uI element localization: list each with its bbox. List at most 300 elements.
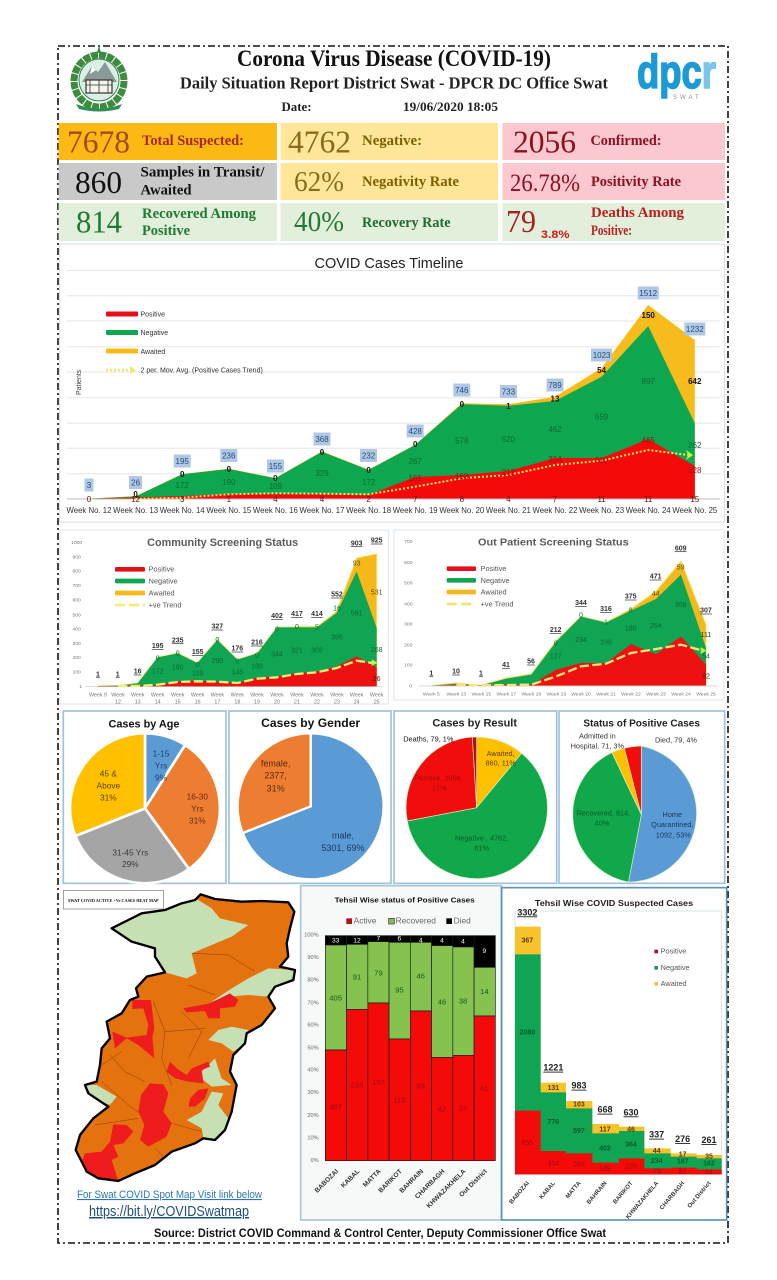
community totals: 1 — [116, 671, 120, 678]
community totals: 155 — [192, 649, 204, 656]
age pie labels: 29% — [122, 859, 139, 869]
tehsil status heading: Tehsil Wise status of Positive Cases — [335, 896, 475, 905]
out patient y axis: 0 — [409, 683, 412, 689]
died value labels: 3 — [180, 495, 185, 504]
died value labels: 12 — [131, 495, 141, 504]
community y axis — [71, 540, 82, 690]
age pie labels: 45 & — [100, 769, 117, 779]
weekly total labels: 1232 — [686, 325, 704, 334]
died value labels: 4 — [320, 495, 325, 504]
subtitle: Daily Situation Report District Swat - DPCR DC Office Swat — [180, 74, 609, 92]
community area: awaited — [98, 554, 377, 686]
out patient totals: 212 — [550, 627, 562, 634]
positive value labels — [409, 436, 702, 483]
community y axis: 800 — [73, 569, 81, 575]
timeline week labels: Week No. 12 — [67, 506, 111, 515]
tehsil status category labels: Out District — [458, 1168, 489, 1199]
gender pie labels: 5301, 69% — [322, 843, 364, 853]
out patient week labels: Week 5 — [423, 691, 440, 697]
community week labels: Week — [211, 692, 224, 698]
out patient series labels: 234 — [575, 637, 587, 644]
KPI card: negative: 4762 — [288, 124, 351, 160]
timeline week labels: Week No. 13 — [113, 506, 158, 515]
suspected positive labels: 64 — [705, 1170, 713, 1177]
weekly total labels: 746 — [455, 386, 469, 395]
out patient week labels — [423, 691, 716, 697]
KPI card: samples awaited: Samples in Transit/ — [140, 164, 265, 180]
out patient trend line — [456, 645, 707, 685]
recovered labels: 95 — [395, 986, 404, 995]
recovered labels — [329, 968, 489, 1006]
out patient y axis: 100 — [404, 663, 413, 669]
report date — [282, 99, 499, 114]
died value labels: 4 — [273, 495, 278, 504]
community series labels: 0 — [235, 659, 239, 666]
status pie labels: Admitted in — [579, 731, 616, 740]
tehsil status y axis: 50% — [307, 1045, 319, 1051]
suspected positive labels: 314 — [548, 1161, 559, 1168]
KPI card: recovered: Recovered Among — [142, 206, 257, 222]
suspected legend — [654, 947, 690, 988]
out patient series labels: 199 — [600, 640, 612, 647]
heat map title box: SWAT COVID ACTIVE +Ve CASES HEAT MAP — [68, 898, 159, 903]
suspected awaited labels: 367 — [522, 937, 533, 944]
suspected category labels: MATTA — [565, 1180, 583, 1200]
map link caption: For Swat COVID Spot Map Visit link below — [77, 1189, 262, 1201]
died value labels: 11 — [597, 495, 606, 504]
community series labels: 0 — [176, 651, 180, 658]
heat map title box — [63, 890, 163, 909]
negative value labels: 329 — [315, 469, 329, 478]
tehsil status category labels: CHARBAGH — [414, 1168, 447, 1201]
tehsil status y axis: 70% — [307, 1000, 319, 1006]
died value labels: 15 — [690, 495, 700, 504]
community week labels: Week — [250, 692, 264, 698]
suspected negative labels: 162 — [703, 1161, 715, 1168]
out patient legend: Awaited — [481, 588, 507, 597]
community totals: 402 — [271, 613, 283, 620]
tehsil status category labels: KABAL — [340, 1168, 361, 1190]
suspected totals: 668 — [597, 1105, 612, 1115]
panel: tehsil wise status of positive cases — [301, 886, 501, 1220]
timeline week labels: Week No. 23 — [579, 506, 624, 515]
tehsil status y axis: 30% — [307, 1090, 319, 1096]
community area: negative — [98, 571, 377, 686]
community y axis: 900 — [73, 555, 81, 561]
recovered labels: 91 — [353, 972, 361, 981]
area: negative — [89, 326, 695, 499]
timeline week labels: Week No. 15 — [206, 506, 252, 515]
out patient y axis: 300 — [404, 622, 413, 628]
community totals: 414 — [311, 611, 323, 618]
tehsil status category labels: MATTA — [362, 1168, 383, 1189]
out patient y axis — [404, 539, 413, 689]
community totals: 235 — [172, 637, 184, 644]
source footer: Source: District COVID Command & Control Center, Deputy Commissioner Office Swat — [154, 1226, 606, 1240]
out patient totals: 1 — [479, 670, 483, 677]
out patient series labels — [550, 564, 711, 681]
panel: COVID cases timeline — [60, 244, 724, 522]
out patient series labels: 111 — [701, 632, 711, 639]
community y axis: 600 — [73, 598, 81, 604]
suspected awaited labels: 46 — [627, 1126, 635, 1133]
weekly total labels: 368 — [315, 435, 329, 444]
out patient totals: 10 — [452, 669, 460, 676]
status pie labels — [571, 731, 697, 840]
community legend — [115, 565, 181, 609]
weekly total labels: 26 — [131, 478, 141, 488]
tehsil status category labels: BABOZAI — [314, 1168, 340, 1195]
out patient week labels: Week 24 — [671, 691, 691, 697]
died value labels: 8 — [460, 495, 465, 504]
out patient area: negative — [431, 575, 706, 686]
out patient y axis: 700 — [404, 539, 413, 545]
died labels: 4 — [440, 938, 444, 945]
timeline legend: Positive — [140, 312, 165, 318]
out patient week labels: Week 22 — [621, 691, 641, 697]
suspected totals — [517, 907, 716, 1145]
out patient totals: 316 — [600, 606, 612, 613]
community totals: 327 — [212, 624, 223, 631]
community legend: Awaited — [149, 588, 175, 597]
community week labels: Week — [310, 692, 324, 698]
timeline week labels: Week No. 17 — [300, 506, 344, 515]
report date: Date: — [282, 99, 312, 114]
community series labels: 321 — [291, 647, 303, 654]
community week labels: 14 — [155, 700, 161, 706]
suspected category labels: BARIKOT — [612, 1180, 635, 1206]
suspected totals: 1221 — [543, 1063, 563, 1073]
timeline week labels: Week No. 16 — [253, 506, 298, 515]
community totals: 176 — [232, 646, 243, 653]
tehsil status y axis: 80% — [307, 977, 319, 983]
community series labels: 146 — [232, 669, 243, 676]
tehsil status y axis: 40% — [307, 1068, 319, 1074]
map district outline — [76, 894, 295, 1181]
community y axis: 100 — [73, 669, 81, 675]
header: left district logo — [74, 45, 124, 112]
community week labels: Week — [231, 692, 244, 698]
status pie labels: 40% — [595, 819, 610, 828]
suspected positive labels: 855 — [522, 1140, 533, 1147]
tehsil status legend — [346, 916, 471, 926]
out patient y axis: 600 — [404, 560, 413, 566]
suspected negative labels: 597 — [573, 1128, 585, 1135]
suspected totals: 276 — [675, 1134, 690, 1144]
community series labels: 0 — [196, 662, 200, 669]
community week labels: Week — [370, 692, 384, 698]
suspected category labels: CHARBAGH — [659, 1181, 686, 1211]
out patient week labels: Week 18 — [522, 691, 541, 697]
tehsil status y axis: 90% — [307, 955, 319, 961]
map high-case areas — [82, 993, 238, 1181]
KPI card: confirmed: 2056 — [513, 124, 576, 160]
KPI card: negativity rate: Negativity Rate — [362, 174, 460, 190]
community week labels: 22 — [314, 700, 320, 706]
age pie labels: Yrs — [155, 760, 167, 770]
out patient totals: 375 — [625, 594, 637, 601]
community series labels: 302 — [311, 647, 323, 654]
KPI card: confirmed — [502, 123, 725, 160]
out patient legend: Positive — [481, 564, 506, 573]
weekly total labels: 236 — [222, 452, 236, 460]
KPI card: recovered: Positive — [142, 223, 191, 239]
KPI card: recovery rate: 40% — [294, 207, 344, 238]
community totals — [96, 538, 383, 678]
suspected positive labels — [522, 1140, 713, 1177]
community week labels: Week — [191, 692, 205, 698]
died labels: 6 — [397, 936, 401, 943]
timeline week labels: Week No. 25 — [672, 506, 718, 515]
community week labels: 16 — [195, 700, 201, 706]
community series labels: 16 — [333, 605, 341, 612]
title: Corona Virus Disease (COVID-19) — [237, 46, 551, 71]
community series labels — [152, 560, 383, 683]
out patient series labels: 306 — [675, 602, 687, 609]
KPI card: recovery rate: Recovery Rate — [362, 215, 451, 231]
community y axis: 200 — [73, 655, 81, 661]
active labels: 37 — [459, 1104, 467, 1113]
weekly total labels: 232 — [362, 452, 376, 460]
out patient series labels: 59 — [677, 564, 685, 571]
awaited value labels: 0 — [320, 448, 325, 457]
died labels: 33 — [332, 937, 340, 944]
result pie labels: Positive, 2056, — [415, 773, 463, 782]
y axis label: Patients — [76, 369, 83, 395]
community series labels: 0 — [255, 652, 259, 659]
map link url: https://bit.ly/COVIDSwatmap — [89, 1203, 249, 1220]
community series labels: 0 — [295, 624, 299, 631]
header: DPCR logo: dpcr — [637, 45, 716, 98]
positive value labels: 161 — [409, 474, 422, 483]
died value labels: 7 — [413, 495, 418, 504]
status pie labels: Quarantined, — [651, 820, 694, 829]
community series labels: 0 — [275, 626, 279, 633]
KPI card: recovered — [58, 203, 277, 241]
tehsil status y axis: 0% — [310, 1158, 319, 1164]
negative value labels: 172 — [176, 481, 189, 490]
panel: cases by gender pie — [229, 711, 391, 883]
age pie labels: 31-45 Yrs — [112, 847, 148, 857]
timeline week labels: Week No. 24 — [626, 506, 671, 515]
timeline legend: 2 per. Mov. Avg. (Positive Cases Trend) — [140, 368, 263, 374]
map base territory — [76, 894, 295, 1181]
out patient series labels: 92 — [702, 674, 710, 681]
gender heading: Cases by Gender — [261, 716, 360, 730]
awaited value labels: 0 — [366, 466, 371, 475]
panel: out patient screening status — [394, 530, 724, 700]
suspected negative labels: 364 — [625, 1142, 637, 1149]
positive value labels: 168 — [455, 472, 469, 481]
suspected positive labels: 220 — [625, 1163, 637, 1170]
died value labels — [87, 495, 700, 504]
community week labels: 19 — [254, 700, 260, 706]
active labels: 99 — [416, 1081, 425, 1090]
tehsil status legend: Died — [454, 916, 471, 926]
out patient week labels: Week 15 — [472, 691, 491, 697]
age pie labels: 16-30 — [187, 792, 208, 802]
out patient series labels: 8 — [629, 608, 633, 615]
timeline heading: COVID Cases Timeline — [314, 255, 464, 272]
suspected heading: Tehsil Wise COVID Suspected Cases — [535, 898, 693, 908]
negative value labels: 109 — [269, 482, 283, 491]
community week labels: Week — [330, 692, 344, 698]
positive value labels: 314 — [548, 455, 562, 464]
died labels — [332, 936, 486, 955]
suspected totals: 983 — [571, 1081, 586, 1091]
community week labels: 17 — [214, 700, 220, 706]
KPI card: total suspected — [58, 123, 277, 160]
awaited value labels: 0 — [180, 470, 185, 479]
result pie labels: 860, 11% — [485, 759, 516, 768]
community totals: 417 — [291, 611, 303, 618]
community legend: +ve Trend — [149, 600, 181, 609]
awaited value labels — [133, 311, 702, 499]
community week labels: 21 — [294, 700, 300, 706]
tehsil status category labels — [314, 1168, 489, 1210]
community series labels: 190 — [172, 665, 184, 672]
result heading: Cases by Result — [432, 717, 517, 729]
weekly total labels: 789 — [548, 381, 562, 390]
suspected category labels: KABAL — [539, 1181, 557, 1201]
suspected totals: 337 — [649, 1130, 664, 1140]
community y axis: 400 — [73, 627, 81, 633]
died labels: 4 — [461, 938, 465, 945]
active labels: 41 — [480, 1084, 489, 1093]
map low-case areas — [85, 900, 295, 1140]
suspected positive labels: 82 — [679, 1168, 687, 1175]
area: awaited — [89, 305, 695, 499]
community week labels: 12 — [115, 700, 121, 706]
tehsil status y axis: 20% — [307, 1113, 319, 1119]
suspected category labels: Out District — [687, 1181, 713, 1210]
died labels: 12 — [353, 937, 361, 944]
out patient week labels: Week 25 — [696, 691, 716, 697]
community week labels: 25 — [374, 700, 380, 706]
community series labels: 109 — [192, 670, 204, 677]
community week labels: Week — [290, 692, 304, 698]
age heading: Cases by Age — [108, 719, 179, 731]
out patient series labels: 0 — [579, 613, 583, 620]
weekly total labels: 155 — [269, 462, 283, 471]
KPI card: confirmed: Confirmed: — [590, 133, 662, 149]
awaited value labels: 0 — [413, 440, 418, 449]
awaited value labels: 0 — [460, 400, 465, 409]
panel: status of positive cases pie — [559, 711, 725, 883]
community trend line — [118, 659, 378, 686]
suspected legend: Positive — [661, 947, 686, 956]
recovered labels: 46 — [438, 997, 446, 1006]
suspected negative labels: 776 — [548, 1119, 559, 1126]
suspected legend: Negative — [661, 963, 690, 972]
tehsil status category labels: BARIKOT — [377, 1168, 404, 1195]
timeline week labels: Week No. 19 — [393, 506, 438, 515]
gender pie labels: female, — [261, 758, 290, 768]
community week labels: 13 — [135, 700, 141, 706]
gender pie labels — [261, 758, 364, 853]
out patient legend: Negative — [481, 576, 510, 585]
suspected positive labels: 79 — [653, 1168, 661, 1175]
KPI card: negativity rate: 62% — [294, 167, 344, 198]
community series labels: 5 — [315, 625, 319, 632]
timeline week labels: Week No. 18 — [346, 506, 391, 515]
suspected awaited labels — [522, 937, 713, 1160]
died value labels: 4 — [506, 495, 511, 504]
weekly total labels: 1512 — [639, 289, 658, 298]
KPI card: positivity rate: Positivity Rate — [591, 174, 682, 190]
weekly total labels: 3 — [87, 481, 92, 490]
community totals: 216 — [251, 640, 263, 647]
KPI card: negativity rate — [280, 163, 498, 200]
gender pie labels: 2377, — [264, 771, 287, 781]
community series labels: 531 — [371, 590, 383, 597]
KPI card: deaths: Deaths Among — [591, 205, 685, 221]
positive value labels: 212 — [502, 468, 516, 477]
timeline legend — [106, 312, 263, 374]
out patient totals: 471 — [650, 574, 662, 581]
result pie labels: Awaited, — [487, 749, 515, 758]
community week labels — [89, 692, 384, 706]
negative value labels: 262 — [688, 441, 702, 450]
died value labels: 7 — [553, 495, 558, 504]
tehsil status category labels: KHWAZAKHELA — [426, 1168, 468, 1210]
community heading: Community Screening Status — [147, 537, 298, 549]
active labels: 42 — [438, 1105, 446, 1114]
weekly total labels: 428 — [409, 427, 422, 436]
awaited value labels: 642 — [688, 377, 702, 386]
out patient week labels: Week 19 — [547, 691, 566, 697]
out patient legend: +ve Trend — [481, 600, 513, 609]
suspected awaited labels: 131 — [548, 1085, 559, 1092]
community area: positive — [98, 656, 377, 686]
gender pie slices — [238, 733, 384, 879]
map: Swat district heat map — [76, 894, 295, 1181]
age pie labels: 9% — [155, 772, 168, 782]
out patient series labels: 44 — [652, 591, 660, 598]
negative value labels: 520 — [502, 435, 516, 444]
KPI card: samples awaited: Awaited — [140, 182, 192, 198]
positive value labels: 310 — [595, 456, 609, 465]
out patient totals — [429, 545, 712, 677]
community legend: Positive — [149, 565, 174, 574]
out patient y axis: 200 — [404, 642, 413, 648]
weekly total labels — [84, 286, 705, 492]
community week labels: Week — [111, 692, 125, 698]
gender pie labels: male, — [332, 830, 354, 840]
community y axis: 700 — [73, 583, 81, 589]
suspected negative labels: 402 — [599, 1146, 611, 1153]
awaited value labels: 0 — [227, 465, 232, 474]
out patient totals: 609 — [675, 545, 687, 552]
KPI card: positivity rate: 26.78% — [510, 170, 580, 197]
negative value labels: 897 — [642, 377, 655, 386]
stepped area: negative — [515, 954, 722, 1174]
died labels: 7 — [376, 936, 380, 943]
positive value labels: 465 — [642, 436, 655, 445]
age pie labels: 31% — [189, 815, 206, 825]
community week labels: 18 — [234, 700, 240, 706]
recovered labels: 46 — [416, 972, 425, 981]
suspected positive labels: 149 — [599, 1166, 611, 1173]
community week labels: 20 — [274, 700, 280, 706]
out patient y axis: 400 — [404, 601, 413, 607]
recovered labels: 14 — [480, 987, 489, 996]
community totals: 195 — [152, 643, 164, 650]
out patient area: awaited — [431, 561, 706, 686]
timeline week labels: Week No. 22 — [533, 506, 577, 515]
timeline legend: Awaited — [140, 349, 165, 356]
KPI card: negative — [280, 123, 498, 160]
